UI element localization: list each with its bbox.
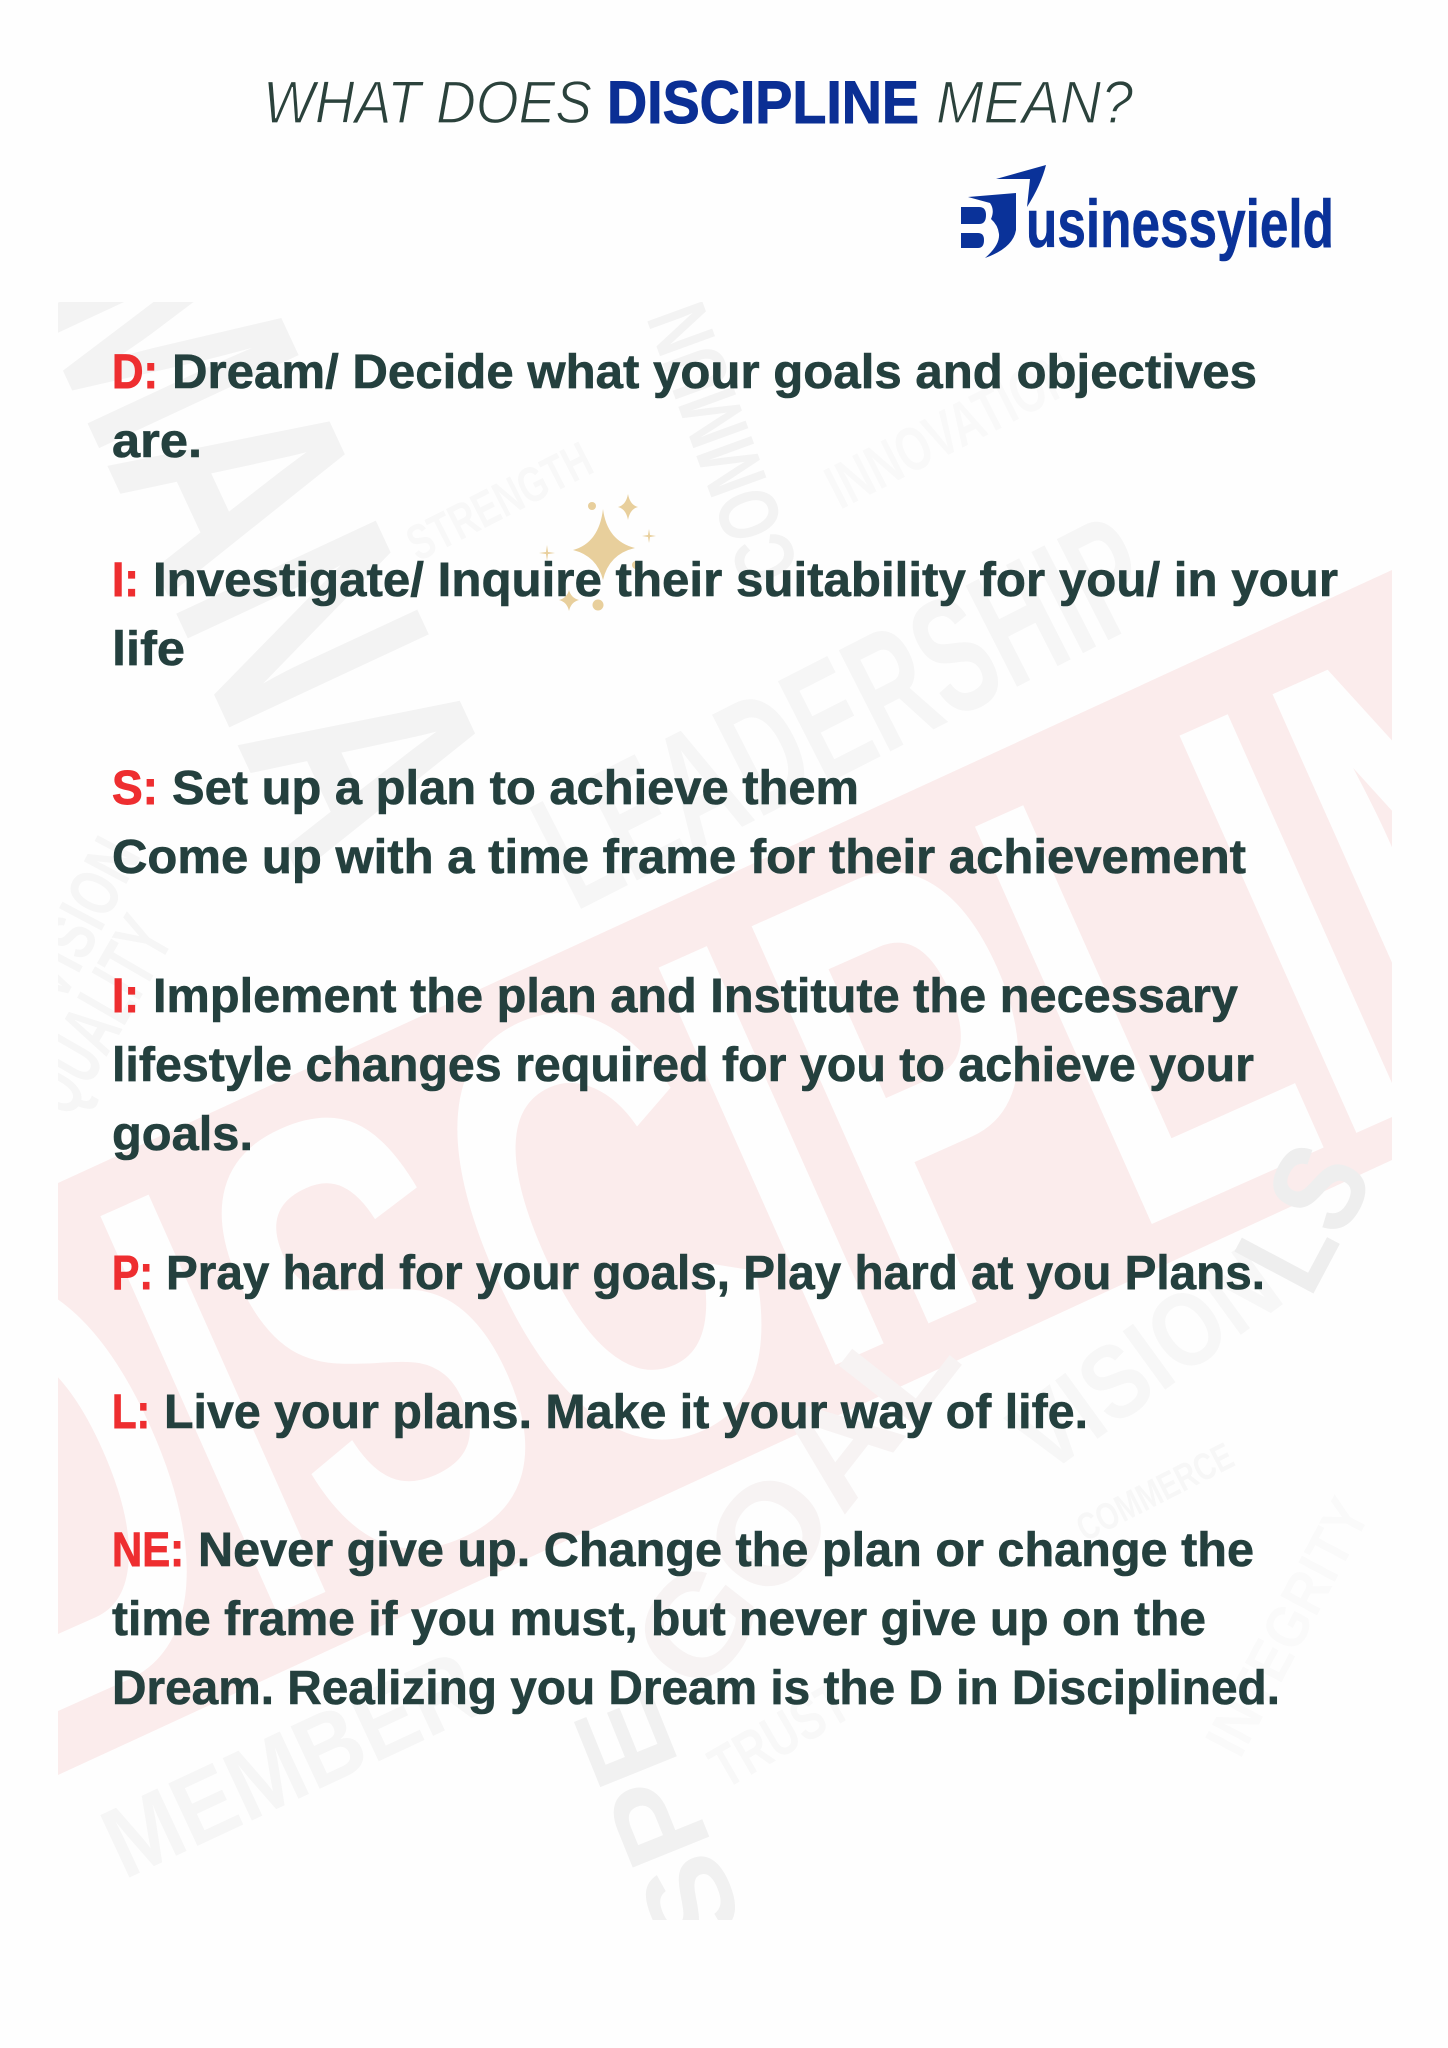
- title part: MEAN?: MEAN?: [936, 69, 1134, 136]
- title: [263, 69, 1134, 136]
- logo: Businessyield: [961, 165, 1334, 262]
- entry S: [112, 762, 1246, 884]
- logo wordmark: usinessyield: [1026, 186, 1334, 262]
- entry NE: [112, 1524, 1280, 1715]
- watermark: INNOVATION: INNOVATION: [815, 338, 1087, 522]
- watermark: STRENGTH: STRENGTH: [398, 431, 601, 572]
- line: life: [112, 623, 185, 676]
- line: Implement the plan and Institute the necessary: [153, 970, 1238, 1023]
- line: Investigate/ Inquire their suitability for you/ in your: [153, 554, 1338, 607]
- watermark: red diagonal band: [58, 570, 1392, 1775]
- key L: L:: [112, 1386, 150, 1439]
- line: are.: [112, 415, 202, 468]
- line: Pray hard for your goals, Play hard at you Plans.: [166, 1247, 1265, 1300]
- icon: gold sparkles: [539, 494, 656, 611]
- line: goals.: [112, 1108, 253, 1161]
- watermark: gray letters right edge: LS: [1206, 1121, 1400, 1313]
- text block: acronym entries: [112, 346, 1338, 1715]
- background watermark collage: [58, 302, 1392, 1920]
- key S: S:: [112, 762, 158, 815]
- watermark: TRUST: TRUST: [698, 1668, 861, 1801]
- logo icon: B with arrow swoosh: [961, 165, 1046, 258]
- entry P: [112, 1247, 1265, 1300]
- watermark: COMMUNICATION: COMMUN: [629, 291, 818, 596]
- key I: I:: [112, 970, 139, 1023]
- watermark: VISION left: VISION: [6, 825, 155, 1012]
- entry D: [112, 346, 1257, 468]
- watermark: COMMERCE: COMMERCE: [1070, 1435, 1241, 1550]
- line: Come up with a time frame for their achievement: [112, 831, 1246, 884]
- key NE: NE:: [112, 1524, 184, 1577]
- line: time frame if you must, but never give up on the: [112, 1593, 1206, 1646]
- key P: P:: [112, 1247, 153, 1300]
- line: Live your plans. Make it your way of life.: [164, 1386, 1088, 1439]
- entry I: [112, 970, 1254, 1161]
- watermark: QUALITY left: QUALITY: [8, 902, 190, 1128]
- title part: WHAT DOES: WHAT DOES: [263, 69, 592, 136]
- watermark: MEMBER: MEMBER: [86, 1629, 496, 1900]
- watermark: GOAL: GOAL: [600, 1283, 988, 1718]
- title part: DISCIPLINE: DISCIPLINE: [607, 69, 919, 136]
- line: Dream. Realizing you Dream is the D in Disciplined.: [112, 1662, 1280, 1715]
- watermark: SPE lettering: SPE: [547, 1674, 769, 1965]
- entry I: [112, 554, 1338, 676]
- line: Never give up. Change the plan or change the: [198, 1524, 1254, 1577]
- key D: D:: [112, 346, 158, 399]
- key I: I:: [112, 554, 139, 607]
- watermark: small words lower right: INTEGRITY: [1192, 1487, 1383, 1766]
- line: Set up a plan to achieve them: [172, 762, 859, 815]
- entry L: [112, 1386, 1088, 1439]
- line: lifestyle changes required for you to achieve your: [112, 1039, 1254, 1092]
- line: Dream/ Decide what your goals and objectives: [172, 346, 1257, 399]
- watermark: VISION right: VISION: [990, 1225, 1301, 1496]
